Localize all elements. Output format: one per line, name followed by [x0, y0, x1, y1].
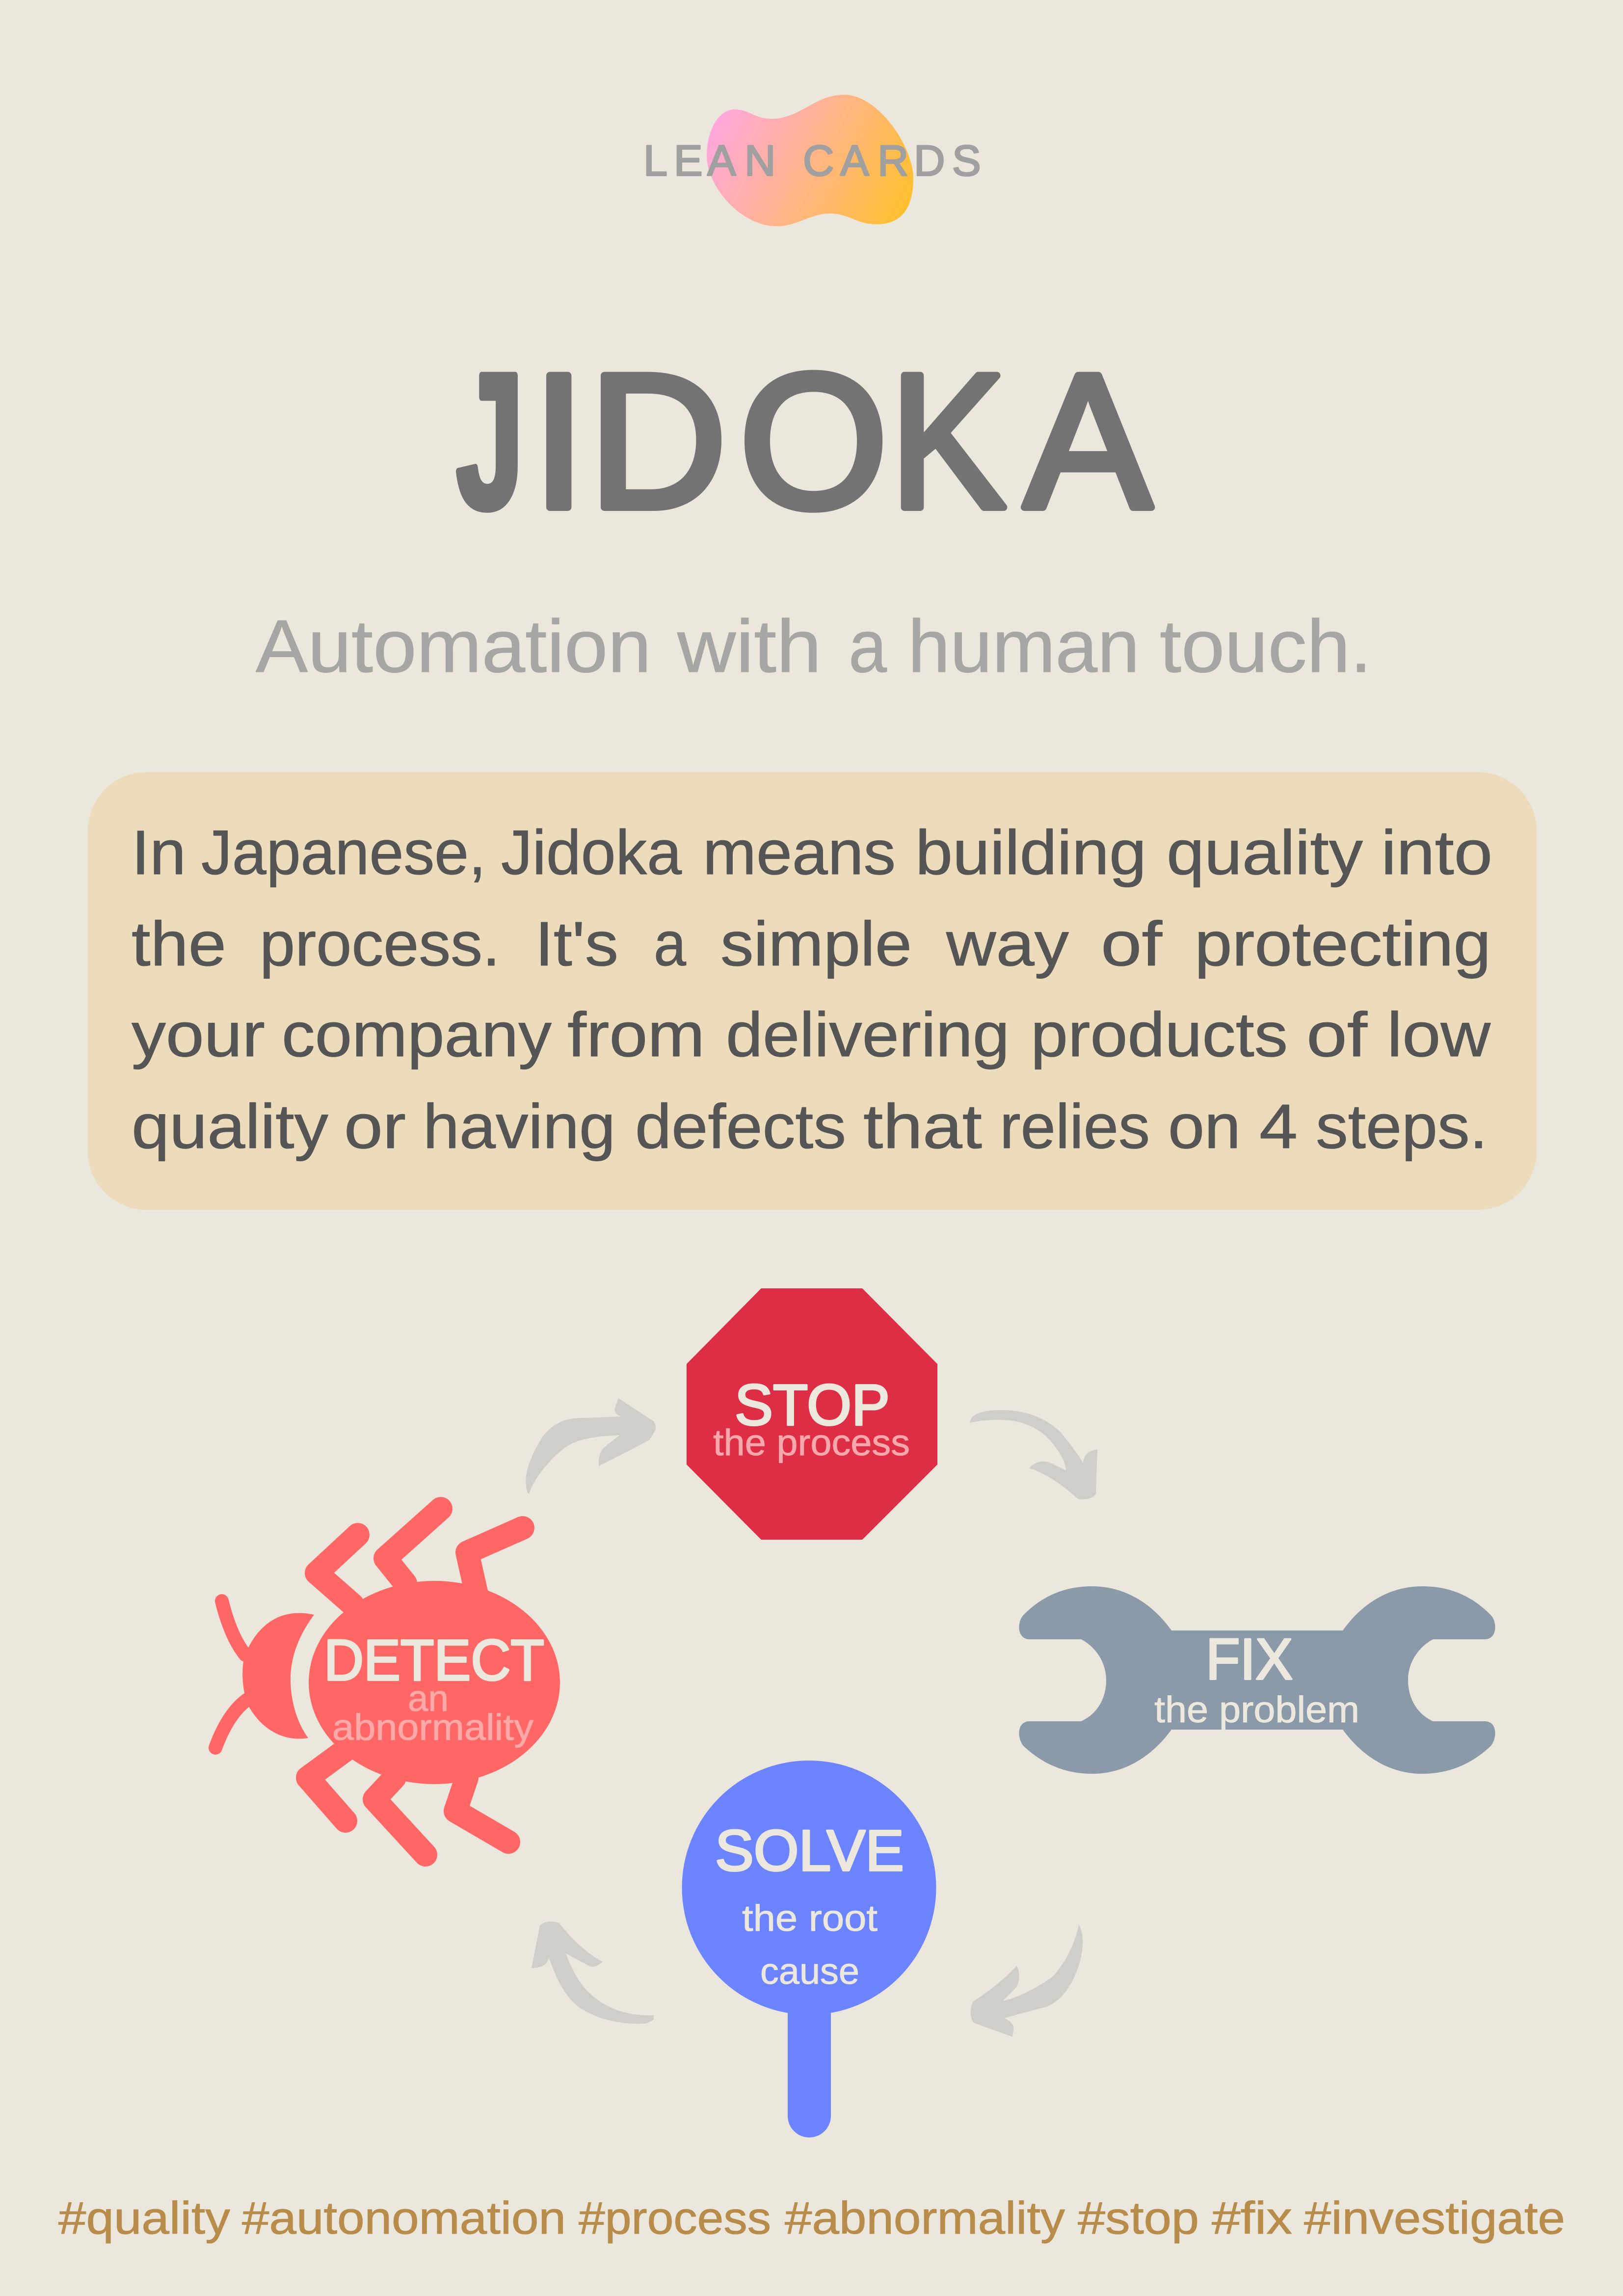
title: J	[456, 334, 524, 548]
hashtags	[58, 2192, 1565, 2243]
definition text: company	[282, 1000, 552, 1070]
arrow: fix to solve	[971, 1924, 1083, 2037]
bug legs and antennae	[215, 1509, 523, 1855]
subtitle: touch.	[1160, 605, 1372, 688]
definition text: process.	[260, 909, 500, 979]
solve sub-label: cause	[760, 1950, 859, 1992]
hashtags: #fix	[1212, 2192, 1292, 2243]
definition text: building	[915, 818, 1146, 888]
definition text: means	[703, 818, 896, 888]
definition text: that	[863, 1092, 982, 1162]
icon: stop sign octagon	[687, 1288, 937, 1540]
bug head	[242, 1613, 314, 1739]
solve heading: SOLVE	[715, 1818, 904, 1883]
hashtags: #stop	[1078, 2192, 1199, 2243]
detect sub-label: abnormality	[332, 1707, 534, 1748]
step: solve	[682, 1761, 936, 2137]
fix heading: FIX	[1206, 1627, 1293, 1692]
arrow: detect to stop	[526, 1398, 656, 1494]
definition text: quality	[1167, 818, 1363, 888]
definition text: way	[946, 909, 1069, 979]
title: D	[589, 334, 727, 548]
title: A	[1024, 334, 1153, 548]
panel: definition	[88, 772, 1537, 1210]
hashtags: #quality	[58, 2192, 231, 2243]
fix sub-label: the problem	[1154, 1689, 1359, 1730]
definition text: from	[567, 1000, 705, 1070]
definition text: into	[1381, 818, 1492, 888]
definition text: products	[1031, 1000, 1288, 1070]
definition text: of	[1306, 1000, 1368, 1070]
bug body	[309, 1581, 560, 1784]
definition text: simple	[720, 909, 912, 979]
definition text: the	[132, 909, 226, 979]
subtitle: with	[677, 605, 822, 688]
definition text: It's	[535, 909, 618, 979]
definition text: a	[654, 909, 687, 979]
title	[456, 334, 1153, 548]
step: detect	[215, 1509, 560, 1855]
solve sub-label	[742, 1897, 878, 1992]
definition text: on	[1168, 1092, 1241, 1162]
definition text	[132, 818, 1492, 1162]
subtitle	[256, 605, 1372, 688]
step: stop	[687, 1288, 937, 1540]
title: I	[532, 334, 585, 548]
definition text: quality	[132, 1092, 328, 1162]
definition text: low	[1387, 1000, 1491, 1070]
step: fix	[1019, 1586, 1495, 1774]
icon: magnifier	[682, 1761, 936, 2137]
hashtags: #investigate	[1304, 2192, 1565, 2243]
definition text: having	[423, 1092, 615, 1162]
definition text: or	[344, 1092, 406, 1162]
definition text: Japanese,	[201, 818, 486, 888]
detect heading: DETECT	[324, 1628, 544, 1693]
subtitle: human	[908, 605, 1140, 688]
detect sub-label: an	[408, 1678, 449, 1719]
definition text: In	[132, 818, 186, 888]
arrow: solve to detect	[532, 1922, 654, 2024]
logo wordmark: LEANCARDS	[643, 136, 981, 185]
icon: gradient blob	[707, 95, 913, 226]
hashtags: #process	[579, 2192, 771, 2243]
definition text: of	[1101, 909, 1163, 979]
detect sub-label	[332, 1678, 534, 1748]
stop heading: STOP	[735, 1373, 890, 1438]
definition text: Jidoka	[501, 818, 682, 888]
definition text: protecting	[1195, 909, 1491, 979]
arrow: stop to fix	[970, 1410, 1097, 1499]
definition text: relies	[1000, 1092, 1150, 1162]
subtitle: Automation	[256, 605, 651, 688]
hashtags: #abnormality	[785, 2192, 1065, 2243]
definition text: 4	[1259, 1092, 1298, 1162]
title: K	[890, 334, 1006, 548]
panel background	[88, 772, 1537, 1210]
subtitle: a	[849, 605, 887, 688]
stop sub-label: the process	[713, 1422, 910, 1463]
definition text: defects	[635, 1092, 846, 1162]
title: O	[739, 334, 888, 548]
icon: wrench	[1019, 1586, 1495, 1774]
logo: Lean Cards	[643, 95, 981, 226]
solve sub-label: the root	[742, 1897, 878, 1939]
definition text: steps.	[1316, 1092, 1488, 1162]
icon: bug	[215, 1509, 560, 1855]
hashtags: #autonomation	[242, 2192, 566, 2243]
definition text: delivering	[726, 1000, 1010, 1070]
definition text: your	[132, 1000, 265, 1070]
